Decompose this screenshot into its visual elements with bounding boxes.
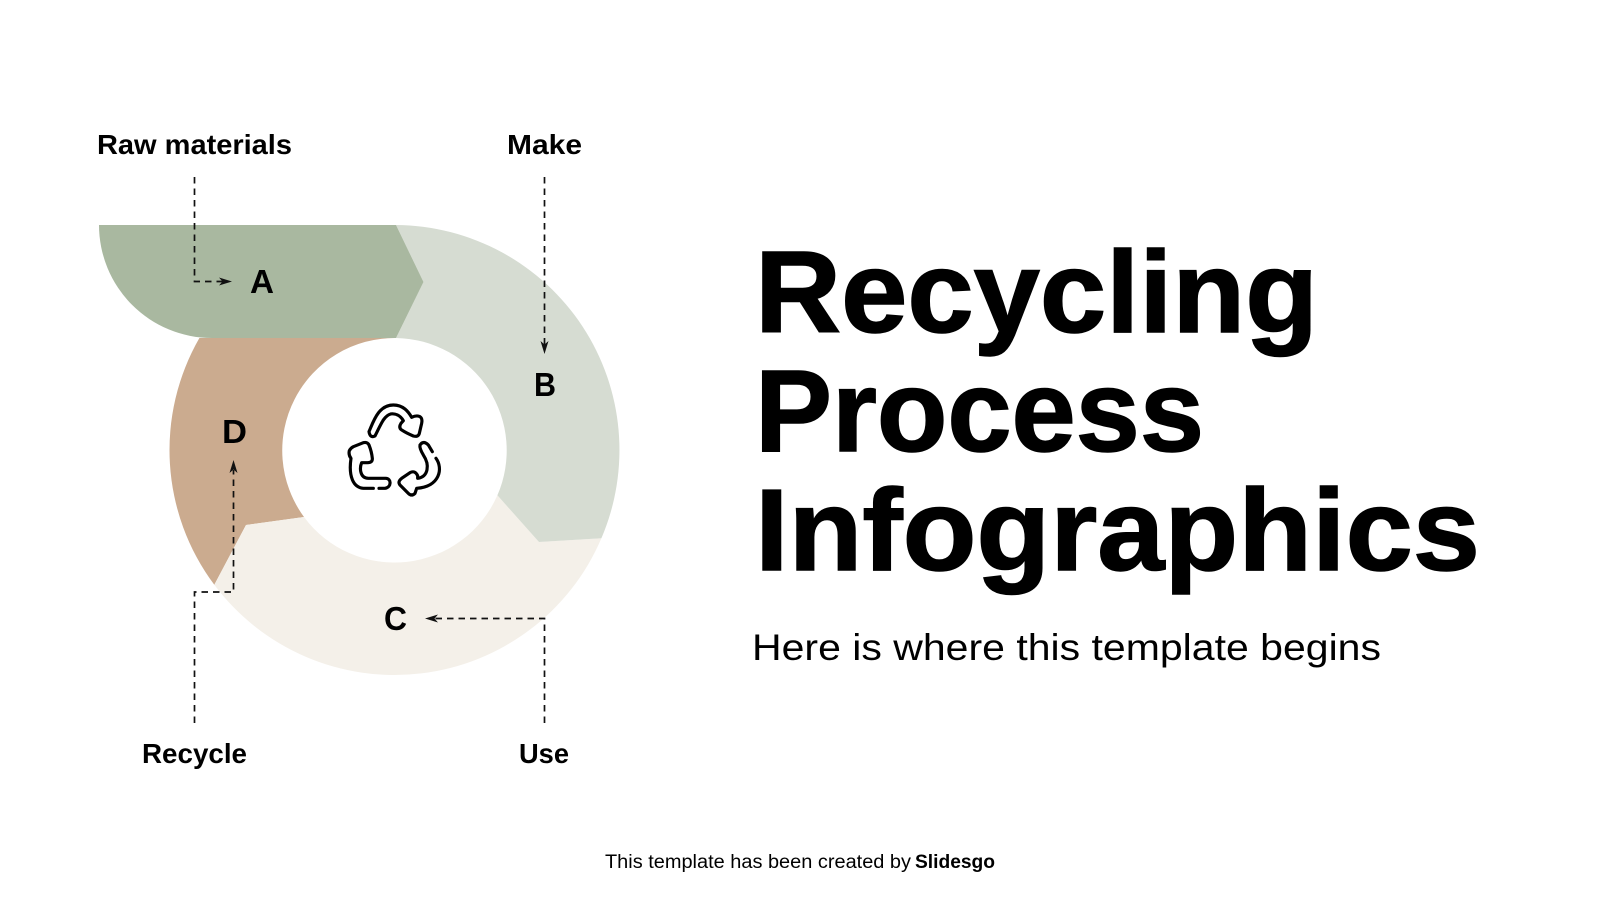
arrow: raw materials to A [194,177,232,286]
arrow: use to C [425,614,544,723]
segment A: raw materials [99,225,424,338]
letter C: C [384,600,407,637]
letter A: A [250,263,274,300]
cycle diagram [99,225,619,675]
segment C: use [214,495,601,675]
letter D: D [222,413,247,450]
arrow: make to B [540,177,548,354]
segment D: recycle [170,338,396,585]
subtitle: Here is where this template begins [752,627,1381,668]
title: Recycling [755,227,1318,357]
footer credit: Slidesgo [915,852,995,873]
label: Raw materials: Raw materials [97,129,292,160]
label: Make: Make [507,129,582,160]
segment B: make [396,225,619,542]
title: Process [755,346,1204,476]
footer credit: This template has been created by [605,852,912,873]
letter B: B [534,366,556,403]
title [755,227,1480,595]
label: Recycle: Recycle [142,738,247,769]
arrow: recycle to D [194,460,238,723]
title: Infographics [755,465,1480,595]
icon: recycling arrows [349,405,439,495]
label: Use: Use [519,738,569,769]
